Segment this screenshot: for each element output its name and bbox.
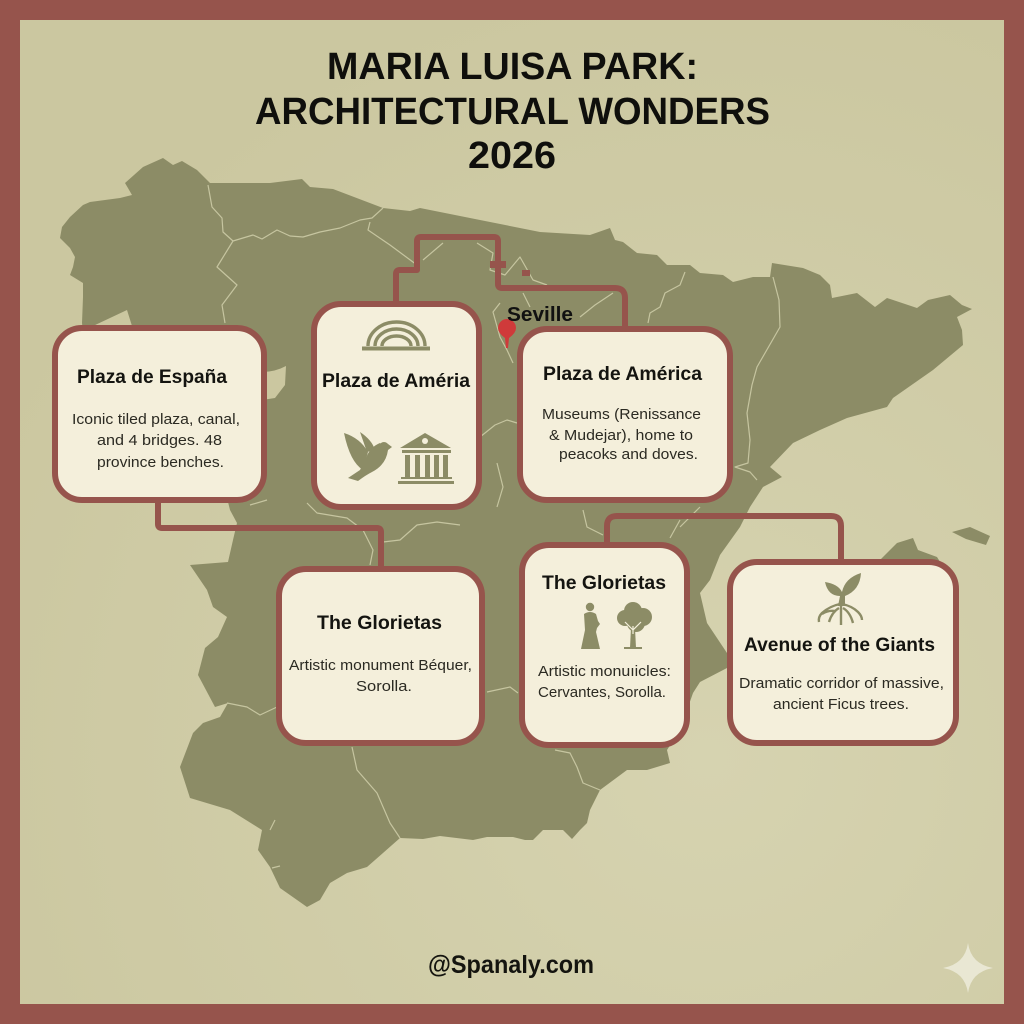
label: Seville: Seville — [507, 304, 573, 326]
panel: Plaza de América — [520, 329, 730, 500]
title: MARIA LUISA PARK: — [327, 46, 698, 88]
Seville marker — [498, 304, 573, 348]
map of Spain — [60, 158, 990, 907]
panel: Avenue of the Giants — [730, 562, 956, 743]
balearic islands — [880, 527, 990, 572]
panel: Plaza de América: Plaza de América — [543, 364, 702, 385]
region borders — [208, 185, 780, 868]
icon: sprout with roots — [819, 573, 862, 625]
icon: map pin — [498, 319, 516, 348]
panel: The Glorietas (monuments): Artistic monument Béquer, — [289, 658, 472, 674]
panel: Plaza de España — [55, 328, 264, 500]
panel: The Glorietas (monuments): The Glorietas — [317, 613, 442, 634]
panel: Plaza de España: province benches. — [97, 455, 224, 471]
title: 2026 — [468, 135, 556, 177]
panel: The Glorietas (statue and tree): Cervantes, Sorolla. — [538, 685, 666, 701]
panel: Plaza de Améria: Plaza de Améria — [322, 371, 470, 392]
title — [255, 46, 770, 177]
connector: Plaza de España to The Glorietas — [158, 503, 381, 566]
panel: Plaza de América: & Mudejar), home to — [549, 428, 693, 444]
panel: Avenue of the Giants: Avenue of the Giants — [744, 635, 935, 656]
icon: sparkle — [943, 943, 993, 993]
panel: Avenue of the Giants: Dramatic corridor of massive, — [739, 676, 944, 692]
icon: arches — [362, 322, 430, 348]
icon: tree — [617, 602, 652, 649]
icon: dove — [344, 432, 392, 481]
panel: Plaza de España: Iconic tiled plaza, canal, — [72, 412, 240, 428]
title: ARCHITECTURAL WONDERS — [255, 91, 770, 133]
panel: Plaza de América: peacoks and doves. — [559, 447, 698, 463]
panel: The Glorietas (statue and tree) — [522, 545, 687, 745]
panel: The Glorietas (statue and tree): Artistic monuıicles: — [538, 664, 671, 680]
footer handle: @Spanaly.com — [428, 951, 594, 979]
panel: The Glorietas (statue and tree): The Glorietas — [542, 573, 666, 594]
panel: The Glorietas (monuments): Sorolla. — [356, 679, 412, 695]
panel: Plaza de España: Plaza de España — [77, 367, 227, 388]
panel: Avenue of the Giants: ancient Ficus trees. — [773, 697, 909, 713]
connector: The Glorietas to Avenue of the Giants — [607, 516, 841, 559]
icon: classical building — [398, 433, 454, 484]
icon: statue — [581, 603, 600, 649]
panel: The Glorietas (monuments) — [279, 569, 482, 743]
panel: Plaza de América: Museums (Renissance — [542, 407, 701, 423]
panel: Plaza de Améria — [314, 304, 479, 507]
connector: Plaza de Améria to Plaza de América — [396, 237, 625, 326]
panel: Plaza de España: and 4 bridges. 48 — [97, 433, 222, 449]
